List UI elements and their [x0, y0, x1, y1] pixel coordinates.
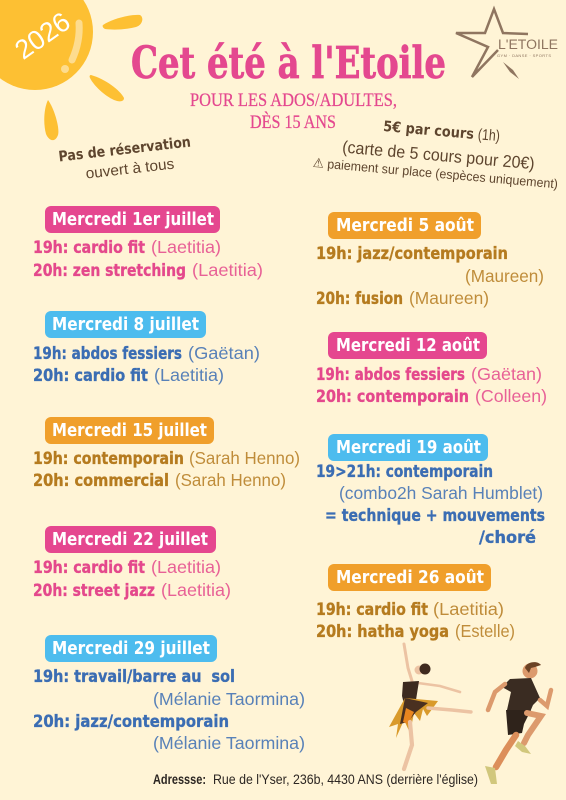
panel: Mercredi 1er juillet: 20h: zen stretching: [33, 261, 186, 280]
illustration: dancer: [389, 644, 471, 769]
panel: Mercredi 15 juillet: 20h: commercial: [33, 471, 169, 490]
subtitle: POUR LES ADOS/ADULTES,: [190, 91, 397, 111]
panel: Mercredi 22 juillet: (Laetitia): [151, 557, 221, 577]
text: pricing note: 5€ par cours: [383, 119, 475, 143]
text: pricing note: (carte de 5 cours pour 20€): [342, 137, 535, 173]
panel: Mercredi 1er juillet: (Laetitia): [192, 260, 263, 280]
panel: Mercredi 29 juillet: [33, 635, 305, 753]
panel: Mercredi 8 juillet: (Laetitia): [154, 365, 224, 385]
panel: Mercredi 8 juillet: 19h: abdos fessiers: [33, 344, 182, 363]
panel: Mercredi 12 août: (Gaëtan): [471, 364, 542, 384]
text: address: Adressse:: [153, 772, 206, 787]
panel: Mercredi 19 août: (combo2h Sarah Humblet): [339, 483, 543, 503]
panel: Mercredi 15 juillet: (Sarah Henno): [175, 470, 286, 490]
panel: Mercredi 29 juillet: (Mélanie Taormina): [153, 689, 305, 709]
panel: Mercredi 22 juillet: (Laetitia): [161, 580, 231, 600]
panel: Mercredi 22 juillet: Mercredi 22 juillet: [52, 529, 208, 550]
panel: Mercredi 12 août: 19h: abdos fessiers: [316, 365, 465, 384]
panel: Mercredi 5 août: 19h: jazz/contemporain: [316, 244, 508, 263]
panel: Mercredi 19 août: [316, 434, 545, 547]
panel: Mercredi 5 août: (Maureen): [409, 288, 489, 308]
panel: Mercredi 26 août: 20h: hatha yoga: [316, 622, 449, 641]
panel: Mercredi 8 juillet: (Gaëtan): [188, 343, 260, 363]
panel: Mercredi 26 août: 19h: cardio fit: [316, 600, 428, 619]
panel: Mercredi 29 juillet: 20h: jazz/contemporain: [33, 712, 229, 731]
panel: Mercredi 8 juillet: [33, 311, 260, 385]
panel: Mercredi 22 juillet: 20h: street jazz: [33, 581, 155, 600]
panel: Mercredi 5 août: [316, 212, 544, 308]
text: pricing note: (1h): [477, 126, 501, 145]
panel: Mercredi 19 août: Mercredi 19 août: [336, 437, 481, 458]
title: Cet été à l'Etoile: [131, 38, 446, 89]
panel: Mercredi 5 août: (Maureen): [465, 266, 544, 286]
icon: sun with rays: [0, 0, 142, 140]
subtitle: [190, 91, 397, 133]
panel: Mercredi 8 juillet: 20h: cardio fit: [33, 366, 148, 385]
text: no reservation note: [58, 135, 194, 185]
panel: Mercredi 26 août: (Estelle): [455, 621, 515, 641]
panel: Mercredi 15 juillet: (Sarah Henno): [189, 448, 300, 468]
text: pricing note: ⚠ paiement sur place (espèces uniquement): [312, 155, 559, 191]
panel: Mercredi 1er juillet: Mercredi 1er juillet: [52, 209, 214, 230]
panel: Mercredi 12 août: (Colleen): [475, 386, 547, 406]
subtitle: DÈS 15 ANS: [250, 111, 336, 133]
panel: Mercredi 29 juillet: Mercredi 29 juillet: [52, 638, 210, 659]
text: no reservation note: ouvert à tous: [85, 156, 175, 183]
panel: Mercredi 26 août: Mercredi 26 août: [336, 567, 484, 588]
panel: Mercredi 12 août: 20h: contemporain: [316, 387, 469, 406]
panel: Mercredi 19 août: 19>21h: contemporain: [316, 462, 493, 481]
panel: Mercredi 26 août: [316, 564, 515, 641]
panel: Mercredi 1er juillet: (Laetitia): [151, 237, 221, 257]
logo: L'Etoile star: GYM · DANSE · SPORTS: [497, 53, 551, 58]
panel: Mercredi 12 août: Mercredi 12 août: [336, 335, 480, 356]
panel: Mercredi 29 juillet: 19h: travail/barre au sol: [33, 667, 235, 686]
illustration: runner: [485, 662, 551, 784]
panel: Mercredi 22 juillet: 19h: cardio fit: [33, 558, 145, 577]
panel: Mercredi 22 juillet: [33, 526, 231, 600]
panel: Mercredi 26 août: (Laetitia): [433, 599, 504, 619]
year badge text: 2026: [9, 6, 76, 65]
logo: L'Etoile star: L'ETOILE: [498, 37, 558, 52]
logo: L'Etoile star: [456, 9, 558, 79]
panel: Mercredi 1er juillet: 19h: cardio fit: [33, 238, 145, 257]
text: no reservation note: Pas de réservation: [58, 135, 192, 165]
panel: Mercredi 19 août: /choré: [479, 528, 536, 547]
panel: Mercredi 8 juillet: Mercredi 8 juillet: [52, 314, 199, 335]
text: pricing note: [312, 112, 562, 191]
panel: Mercredi 15 juillet: 19h: contemporain: [33, 449, 184, 468]
panel: Mercredi 5 août: Mercredi 5 août: [336, 215, 474, 236]
panel: Mercredi 5 août: 20h: fusion: [316, 289, 403, 308]
panel: Mercredi 29 juillet: (Mélanie Taormina): [153, 733, 305, 753]
panel: Mercredi 1er juillet: [33, 206, 263, 280]
panel: Mercredi 15 juillet: [33, 417, 300, 490]
panel: Mercredi 15 juillet: Mercredi 15 juillet: [52, 420, 207, 441]
panel: Mercredi 12 août: [316, 332, 547, 406]
text: address: Rue de l'Yser, 236b, 4430 ANS (derrière l'église): [213, 772, 478, 787]
